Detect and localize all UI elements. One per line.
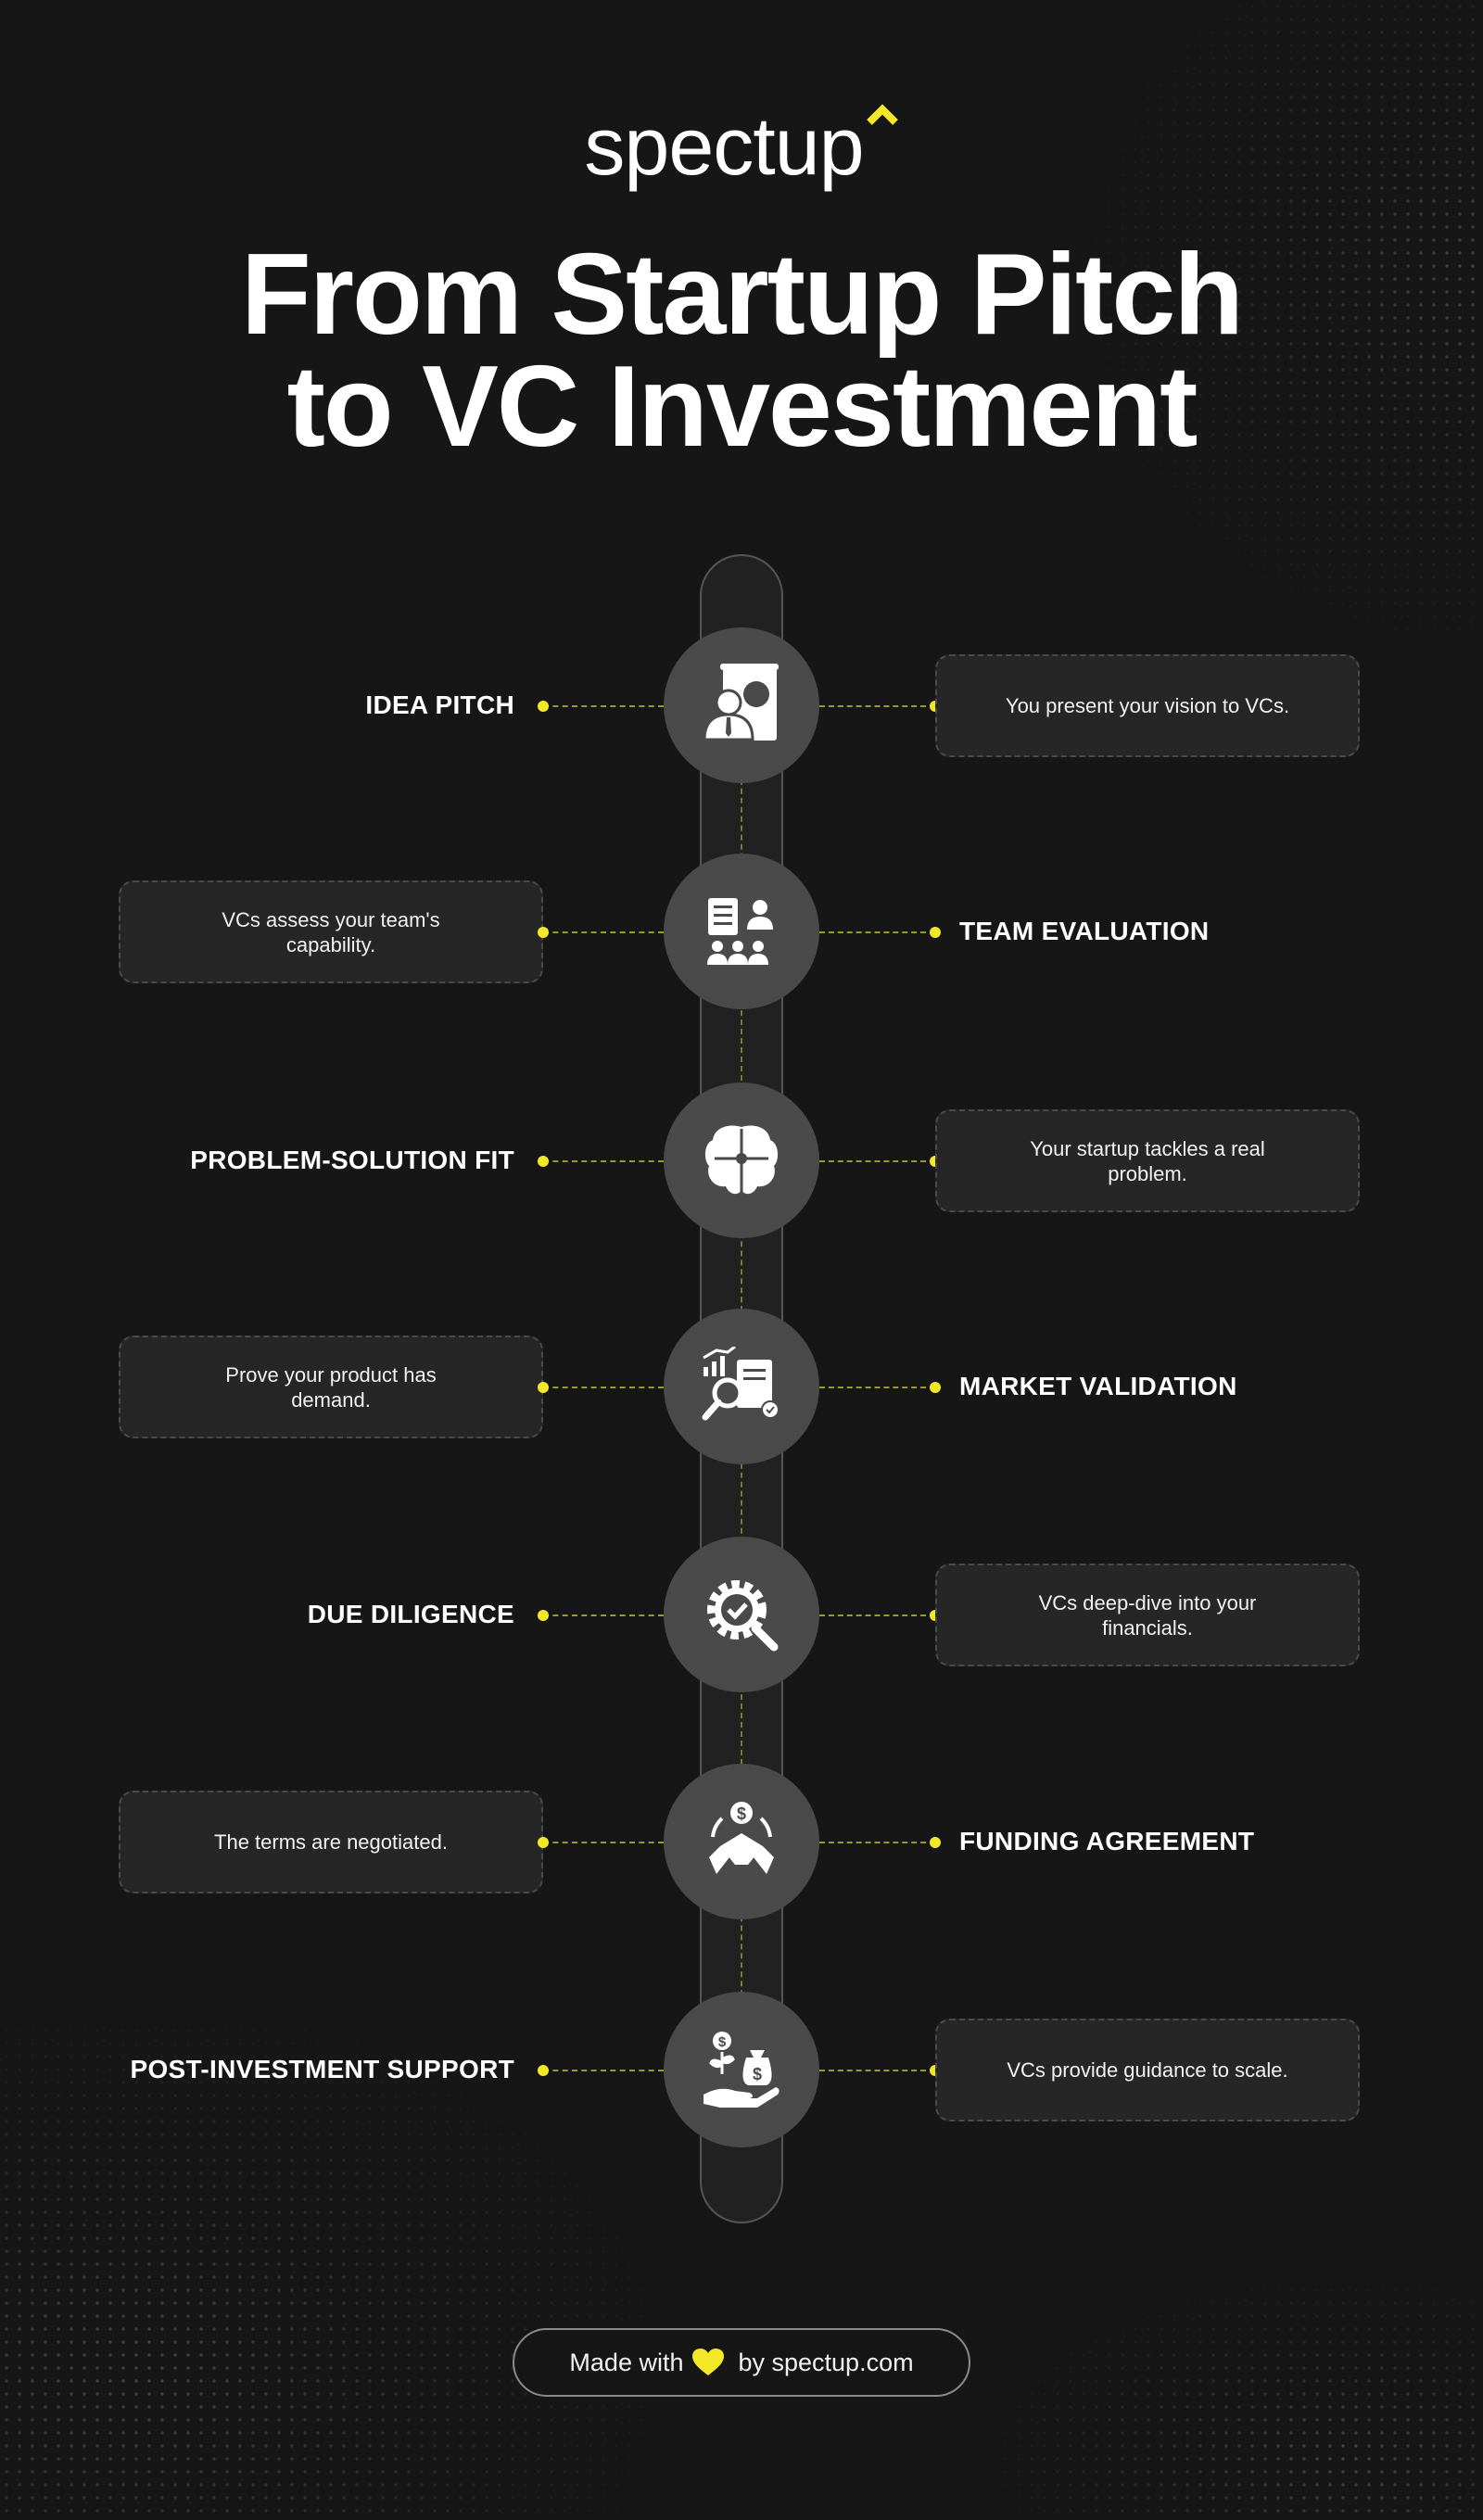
vertical connector bbox=[741, 705, 742, 2070]
step 2: team evaluation: VCs assess your team's capability. bbox=[222, 908, 440, 956]
icon: presenter bbox=[664, 627, 819, 783]
icon: hand with money growth: $ bbox=[753, 2065, 762, 2083]
icon: hand with money growth bbox=[664, 1992, 819, 2147]
icon: market research bbox=[664, 1309, 819, 1464]
step 7: post-investment support: VCs provide guidance to scale. bbox=[1007, 2058, 1288, 2082]
step 4: market validation: MARKET VALIDATION bbox=[959, 1372, 1237, 1400]
icon: handshake money bbox=[664, 1764, 819, 1919]
footer pill bbox=[513, 2328, 970, 2397]
step 2: team evaluation: TEAM EVALUATION bbox=[959, 917, 1209, 945]
footer pill: Made with by spectup.com bbox=[569, 2349, 914, 2376]
title: to VC Investment bbox=[287, 343, 1196, 471]
step 3: problem-solution fit: PROBLEM-SOLUTION FIT bbox=[190, 1146, 514, 1174]
step 6: funding agreement: The terms are negotiated. bbox=[214, 1830, 448, 1854]
icon: team checklist bbox=[664, 854, 819, 1009]
step 4: market validation: Prove your product has demand. bbox=[225, 1362, 437, 1411]
step 4: market validation bbox=[119, 1309, 1237, 1464]
step 7: post-investment support: POST-INVESTMENT SUPPORT bbox=[130, 2055, 514, 2083]
title: From Startup Pitch bbox=[241, 231, 1242, 359]
icon: handshake money: $ bbox=[737, 1805, 746, 1823]
step 3: problem-solution fit: Your startup tackles a real problem. bbox=[1030, 1136, 1265, 1184]
step 1: idea pitch bbox=[365, 627, 1360, 783]
step 5: due diligence: DUE DILIGENCE bbox=[308, 1600, 514, 1628]
title bbox=[241, 231, 1242, 471]
step 6: funding agreement: FUNDING AGREEMENT bbox=[959, 1827, 1254, 1855]
icon: gear check bbox=[664, 1537, 819, 1692]
step 5: due diligence bbox=[308, 1537, 1360, 1692]
step 7: post-investment support bbox=[130, 1992, 1360, 2147]
logo: spectup bbox=[584, 100, 864, 192]
step 5: due diligence: VCs deep-dive into your financials. bbox=[1039, 1590, 1256, 1639]
icon: puzzle brain bbox=[664, 1083, 819, 1238]
step 1: idea pitch: You present your vision to VCs. bbox=[1006, 694, 1289, 717]
step 1: idea pitch: IDEA PITCH bbox=[365, 690, 514, 719]
step 2: team evaluation bbox=[119, 854, 1209, 1009]
step 6: funding agreement bbox=[119, 1764, 1254, 1919]
icon: hand with money growth: $ bbox=[718, 2034, 727, 2050]
step 3: problem-solution fit bbox=[190, 1083, 1360, 1238]
timeline track bbox=[700, 554, 783, 2223]
